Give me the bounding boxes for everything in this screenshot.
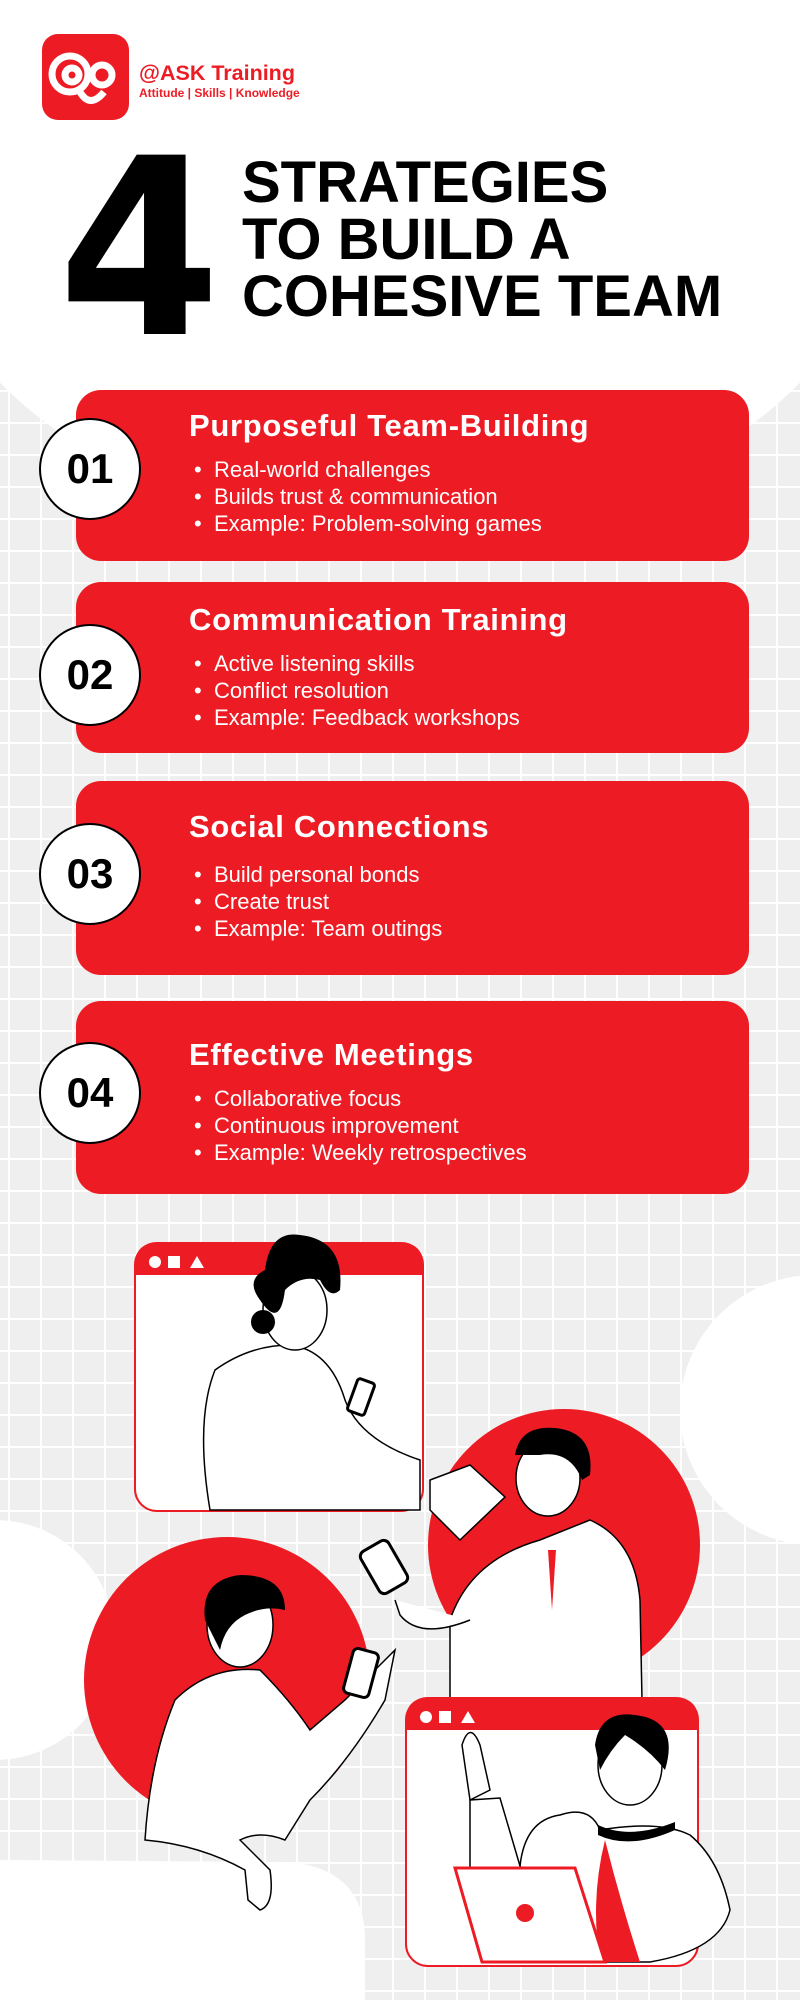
logo icon — [42, 34, 129, 120]
red circles — [84, 1409, 700, 1823]
panel: card 1: Builds trust & communication — [214, 484, 498, 509]
panel: card 2 — [76, 582, 749, 753]
man with phone — [145, 1583, 395, 1910]
panel: card 3: Build personal bonds — [214, 862, 419, 887]
man with envelope — [358, 1440, 642, 1700]
title — [242, 150, 722, 329]
tagline: Attitude | Skills | Knowledge — [139, 86, 300, 100]
white top backdrop — [0, 0, 800, 530]
number badge 01 — [39, 418, 141, 520]
title: STRATEGIES — [242, 150, 608, 215]
panel: card 1 — [76, 390, 749, 561]
panel: card 4: Example: Weekly retrospectives — [214, 1140, 527, 1165]
illustration: people communicating — [0, 1234, 800, 2000]
title: COHESIVE TEAM — [242, 264, 722, 329]
panel: card 4: Continuous improvement — [214, 1113, 459, 1138]
panel: card 1: Example: Problem-solving games — [214, 511, 542, 536]
panel: card 3: Example: Team outings — [214, 916, 442, 941]
panel: card 2: Conflict resolution — [214, 678, 389, 703]
panel: card 2: Communication Training — [189, 602, 568, 637]
panel: card 4: Effective Meetings — [189, 1037, 474, 1072]
big number 4: 4 — [58, 107, 221, 393]
brand name: @ASK Training — [139, 61, 295, 85]
title: TO BUILD A — [242, 207, 571, 272]
number badge 03: 03 — [67, 850, 113, 897]
panel: card 3: Social Connections — [189, 809, 489, 844]
panel: card 2: Active listening skills — [214, 651, 415, 676]
number badge 04: 04 — [67, 1069, 113, 1116]
woman 1 — [204, 1270, 420, 1510]
panel: card 4: Collaborative focus — [214, 1086, 401, 1111]
window 1 — [135, 1234, 423, 1511]
number badge 03 — [39, 823, 141, 925]
number badge 01: 01 — [67, 445, 113, 492]
white blobs — [0, 1275, 800, 2000]
panel: card 1: Purposeful Team-Building — [189, 408, 589, 443]
woman 2 — [462, 1725, 730, 1962]
panel: card 3 — [76, 781, 749, 975]
number badge 02 — [39, 624, 141, 726]
panel: card 2: Example: Feedback workshops — [214, 705, 520, 730]
panel: card 4 — [76, 1001, 749, 1194]
number badge 04 — [39, 1042, 141, 1144]
panel: card 3: Create trust — [214, 889, 329, 914]
logo — [42, 34, 300, 120]
number badge 02: 02 — [67, 651, 113, 698]
window 2 — [406, 1698, 730, 1966]
panel: card 1: Real-world challenges — [214, 457, 430, 482]
